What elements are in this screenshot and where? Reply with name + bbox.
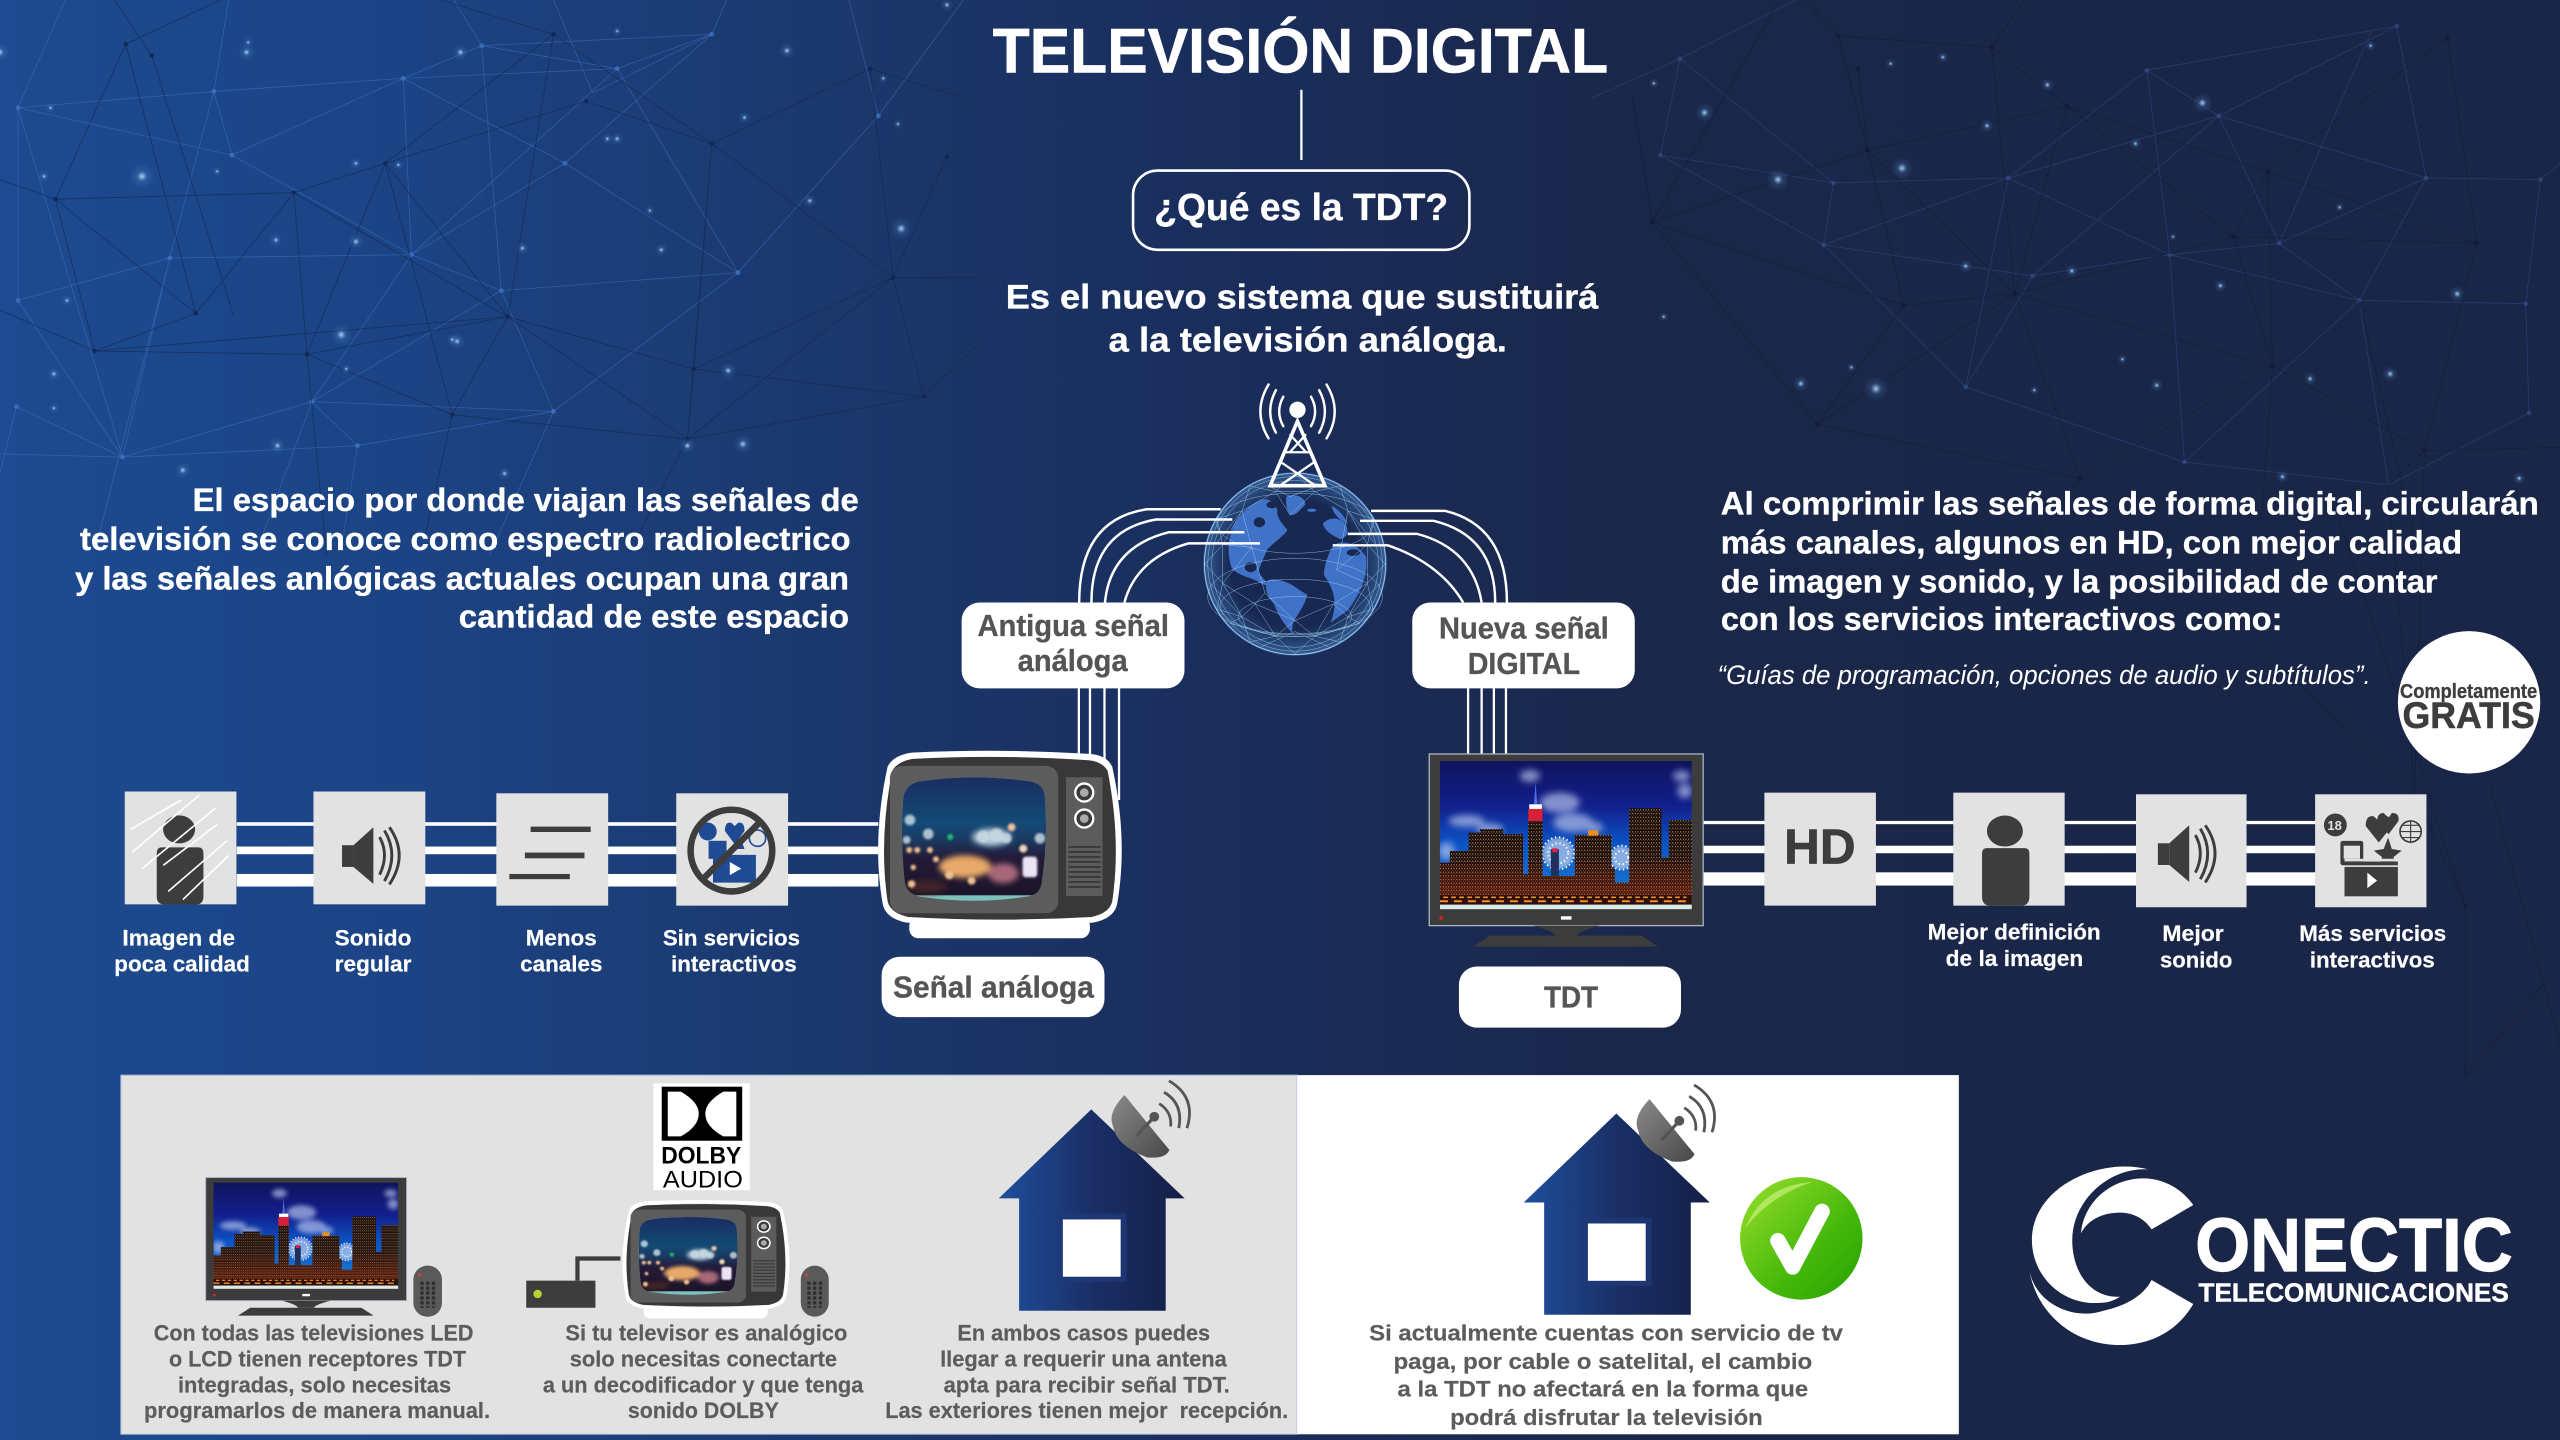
title: TELEVISIÓN DIGITAL <box>993 17 1608 87</box>
pill: señal análoga <box>882 957 1104 1017</box>
question pill: ¿Qué es la TDT? <box>1154 186 1448 228</box>
right paragraph: más canales, algunos en HD, con mejor calidad <box>1721 523 2462 560</box>
left signal bands <box>237 822 878 887</box>
label: sonido regular: regular <box>335 952 412 977</box>
left paragraph <box>75 481 859 635</box>
dolby audio logo: DOLBY <box>661 1143 741 1169</box>
label: sin servicios: interactivos <box>671 952 797 977</box>
globe <box>1203 472 1387 656</box>
right paragraph <box>1721 484 2539 637</box>
logo wordmark: ONECTIC <box>2195 1203 2513 1287</box>
right paragraph: con los servicios interactivos como: <box>1721 600 2282 637</box>
label: mejor sonido <box>2160 921 2232 973</box>
logo tagline: TELECOMUNICACIONES <box>2199 1278 2509 1308</box>
subtitle text: Es el nuevo sistema que sustituirá <box>1006 279 1599 317</box>
box: sonido regular <box>313 792 425 904</box>
box: menos canales <box>496 793 608 906</box>
label: imagen de poca calidad: poca calidad <box>114 952 250 977</box>
logo: conectic <box>2029 1166 2513 1345</box>
right paragraph: de imagen y sonido, y la posibilidad de contar <box>1721 563 2438 600</box>
left paragraph: El espacio por donde viajan las señales de <box>193 481 859 518</box>
text: antenna: Las exteriores tienen mejor recepción. <box>885 1398 1288 1423</box>
label: más servicios <box>2299 921 2446 973</box>
label: nueva señal: DIGITAL <box>1468 646 1580 681</box>
box: hd <box>1764 793 1876 906</box>
lcd tv <box>206 1178 407 1316</box>
label: sonido regular: Sonido <box>335 925 411 950</box>
dolby audio logo <box>653 1083 750 1193</box>
text: antenna: En ambos casos puedes <box>957 1321 1210 1346</box>
text: antenna: apta para recibir señal TDT. <box>944 1372 1230 1397</box>
right signal arcs <box>1333 511 1507 754</box>
panel: grey <box>121 1075 1297 1434</box>
label: nueva señal <box>1412 602 1635 688</box>
house with antenna <box>999 1081 1189 1311</box>
label: sin servicios: Sin servicios <box>663 925 800 950</box>
left paragraph: televisión se conoce como espectro radiolectrico <box>80 520 851 557</box>
label: nueva señal: Nueva señal <box>1439 610 1609 645</box>
label: mejor definición: de la imagen <box>1946 946 2083 971</box>
pill: tdt <box>1459 967 1681 1028</box>
left signal arcs <box>1079 509 1260 800</box>
label: sonido regular <box>335 925 412 977</box>
dolby audio logo: AUDIO <box>663 1167 743 1193</box>
box: mejor definición <box>1953 793 2065 906</box>
label: imagen de poca calidad <box>114 925 250 977</box>
right signal bands <box>1703 821 2317 886</box>
label: antigua señal: análoga <box>1018 643 1129 678</box>
text: analog: sonido DOLBY <box>628 1398 779 1423</box>
box: más servicios: 18 <box>2327 818 2342 833</box>
subtitle text: a la televisión análoga. <box>1109 322 1507 360</box>
text: lcd: programarlos de manera manual. <box>144 1398 490 1423</box>
label: menos canales: canales <box>520 952 602 977</box>
box: mejor sonido <box>2136 794 2247 907</box>
house with antenna <box>1524 1085 1715 1315</box>
logo mark <box>2029 1166 2193 1345</box>
text: pay tv <box>1369 1321 1844 1430</box>
label: mejor sonido: Mejor <box>2162 921 2224 946</box>
label: mejor definición: Mejor definición <box>1928 919 2101 944</box>
box: sin servicios interactivos <box>676 793 788 906</box>
label: más servicios: Más servicios <box>2299 921 2446 946</box>
text: analog: Si tu televisor es analógico <box>565 1321 847 1346</box>
question pill <box>1133 171 1469 250</box>
text: lcd: Con todas las televisiones LED <box>154 1321 473 1346</box>
text: analog <box>543 1321 864 1423</box>
text: pay tv: Si actualmente cuentas con servicio de tv <box>1369 1321 1844 1346</box>
left paragraph: cantidad de este espacio <box>459 598 849 635</box>
check badge <box>1740 1177 1863 1300</box>
text: pay tv: paga, por cable o satelital, el cambio <box>1393 1349 1812 1374</box>
label: sin servicios <box>663 925 800 977</box>
label: imagen de poca calidad: Imagen de <box>122 925 235 950</box>
label: menos canales: Menos <box>526 925 597 950</box>
small analog tv <box>622 1200 789 1318</box>
pill: tdt: TDT <box>1544 979 1598 1014</box>
label: menos canales <box>520 925 602 977</box>
label: más servicios: interactivos <box>2310 948 2435 973</box>
label: mejor definición <box>1928 919 2101 971</box>
text: analog: a un decodificador y que tenga <box>543 1372 864 1397</box>
text: antenna: llegar a requerir una antena <box>940 1347 1227 1372</box>
tower <box>1260 384 1335 486</box>
box: más servicios <box>2315 794 2426 907</box>
pill: señal análoga: Señal análoga <box>893 970 1095 1005</box>
box: imagen de poca calidad <box>125 792 236 904</box>
connector line <box>1300 90 1303 160</box>
decoder <box>526 1258 620 1308</box>
badge: completamente gratis: Completamente <box>2400 681 2537 703</box>
analog tv <box>878 751 1122 938</box>
box: hd: HD <box>1784 821 1856 875</box>
text: lcd: integradas, solo necesitas <box>178 1372 451 1397</box>
subtitle text <box>1006 279 1599 360</box>
remote right <box>801 1266 829 1317</box>
text: lcd <box>144 1321 490 1423</box>
badge: completamente gratis: GRATIS <box>2402 695 2535 736</box>
left paragraph: y las señales anlógicas actuales ocupan una gran <box>75 559 849 596</box>
text: pay tv: a la TDT no afectará en la forma que <box>1398 1377 1808 1402</box>
badge: completamente gratis <box>2398 631 2540 774</box>
text: antenna <box>885 1321 1288 1423</box>
label: mejor sonido: sonido <box>2160 948 2232 973</box>
label: antigua señal <box>962 602 1184 688</box>
right paragraph: Al comprimir las señales de forma digital, circularán <box>1721 484 2539 521</box>
text: analog: solo necesitas conectarte <box>570 1347 837 1372</box>
digital tv <box>1429 754 1703 947</box>
star network background <box>0 0 2560 1078</box>
label: antigua señal: Antigua señal <box>977 608 1169 643</box>
italic quote: “Guías de programación, opciones de audio y subtítulos”. <box>1718 660 2371 690</box>
text: pay tv: podrá disfrutar la televisión <box>1450 1405 1763 1430</box>
text: lcd: o LCD tienen receptores TDT <box>169 1347 467 1372</box>
panel: white <box>1297 1075 1959 1434</box>
remote left <box>413 1266 442 1317</box>
